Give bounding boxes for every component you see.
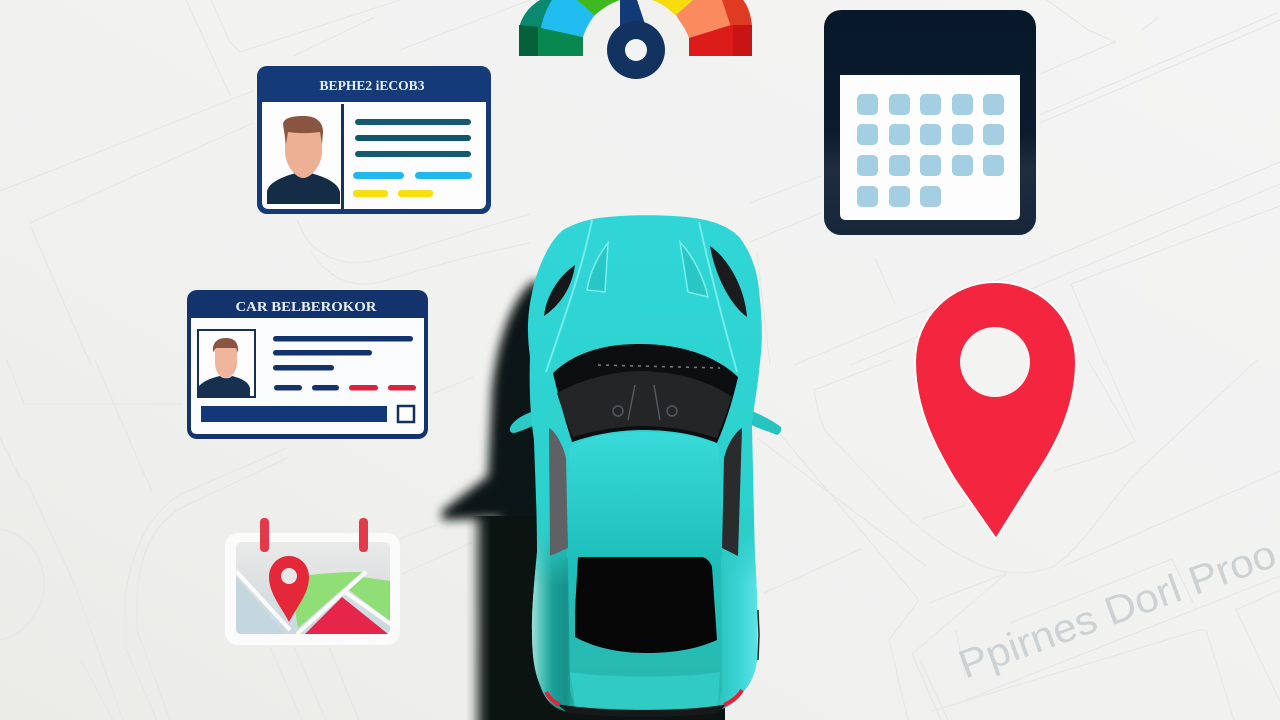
registration bar [201, 406, 387, 422]
door and quarter panels [532, 537, 758, 712]
gauge: green lower segment [519, 25, 583, 56]
detail lines [353, 119, 472, 197]
windshield [553, 344, 738, 443]
right mirror [745, 409, 781, 435]
left wheel vent [544, 265, 575, 316]
license card top [257, 66, 491, 214]
gauge: yellow segment [652, 0, 693, 16]
calendar icon [824, 10, 1036, 235]
card body [262, 102, 486, 209]
gauge: orange segment [676, 0, 732, 38]
registration photo [198, 330, 255, 397]
left mirror [510, 409, 546, 433]
gauge needle and hub [607, 0, 665, 79]
hood highlight lines [546, 220, 737, 372]
rear bumper shadow [557, 704, 727, 717]
location pin [915, 282, 1076, 539]
card heading: BEPHE2 iECOB3 [320, 79, 424, 94]
right hood scoop [680, 242, 708, 297]
registration checkbox [398, 406, 414, 422]
registration detail lines [273, 336, 416, 390]
car top view [510, 214, 781, 717]
gauge: red outer segment [722, 0, 752, 27]
calendar page [840, 75, 1020, 220]
gauge: teal segment [520, 0, 552, 27]
gauge: blue segment [541, 0, 596, 37]
card divider [341, 104, 344, 209]
left side window [549, 428, 568, 556]
car shadow [442, 282, 725, 720]
gauge: inner arc [583, 0, 689, 38]
calendar day grid [857, 94, 1004, 207]
registration card heading: CAR BELBEROKOR [236, 300, 377, 315]
registration card body [191, 318, 424, 434]
car body [520, 214, 770, 717]
map calendar icon [225, 518, 400, 645]
calendar rings [260, 518, 368, 552]
right wheel edge [758, 610, 759, 660]
map area [236, 542, 392, 634]
portrait [267, 116, 340, 204]
roof [567, 432, 722, 557]
left hood scoop [587, 243, 608, 292]
right wheel vent [710, 246, 747, 317]
gauge: green segment [577, 0, 622, 16]
gauge [519, 0, 752, 57]
tail lights [546, 690, 742, 705]
right side window [722, 428, 742, 556]
gauge: red lower segment [689, 25, 733, 56]
dashboard panel [557, 371, 732, 438]
rear spoiler [570, 672, 720, 709]
small map pin [269, 556, 309, 622]
background map label: Ppirnes Dorl Proo [953, 532, 1280, 687]
steering and seats [613, 385, 677, 420]
windshield glints [598, 365, 720, 368]
rear window [575, 557, 717, 653]
car registration card [187, 290, 428, 439]
rear deck [568, 557, 722, 711]
